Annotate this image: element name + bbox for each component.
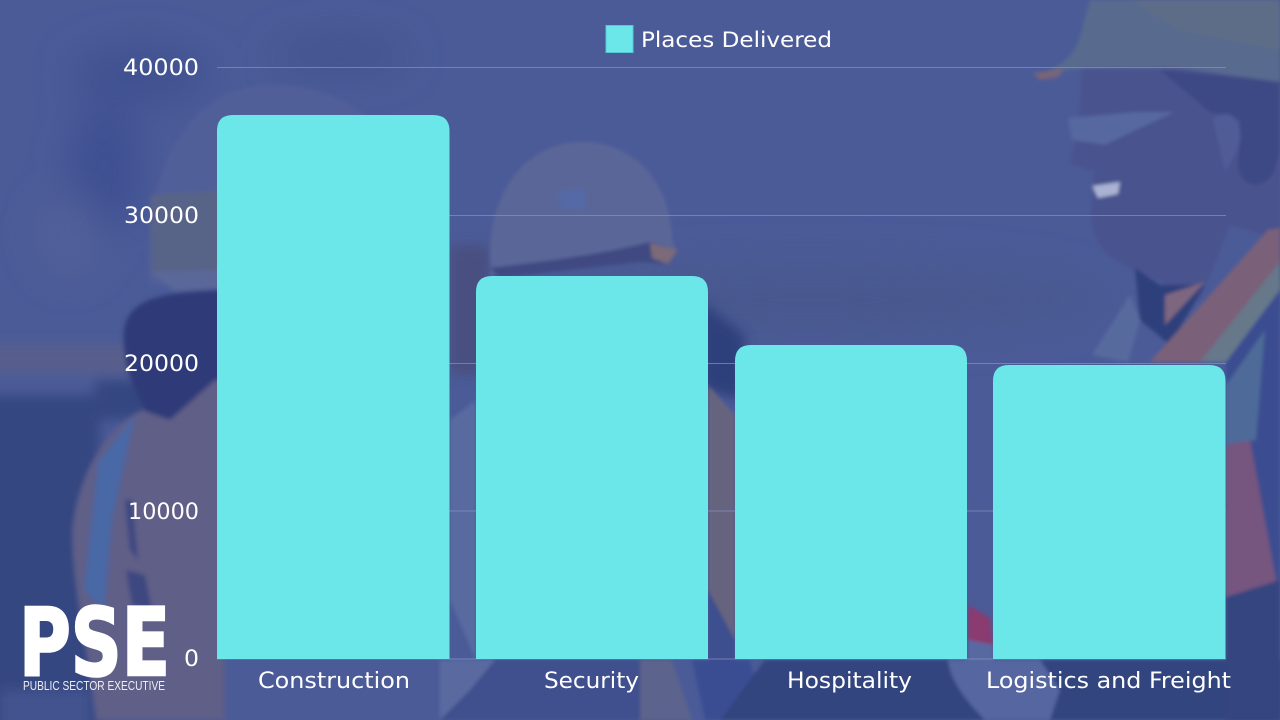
bar chart: [217, 115, 1226, 659]
centre worker: hard hat and vest: [440, 142, 1280, 720]
x axis labels: [258, 669, 1231, 694]
logo: PSE: PSE: [19, 589, 170, 698]
y axis labels: 30000: [124, 204, 199, 229]
legend label: Places Delivered: [641, 28, 832, 53]
left worker: hard hat, hair and vest: [72, 85, 400, 720]
y axis labels: 0: [184, 647, 199, 672]
x axis labels: Logistics and Freight: [986, 669, 1231, 694]
x axis labels: Security: [544, 669, 639, 694]
grid lines: [217, 68, 1226, 659]
y axis labels: [123, 56, 199, 672]
bar: Logistics and Freight: [993, 365, 1226, 659]
bar: Hospitality: [735, 345, 967, 659]
x axis labels: Hospitality: [787, 669, 912, 694]
right worker: hard hat, face and vest: [1033, 0, 1280, 720]
y axis labels: 10000: [128, 500, 199, 525]
legend swatch: [606, 26, 633, 52]
legend: [606, 26, 832, 53]
logo tagline: PUBLIC SECTOR EXECUTIVE: [23, 678, 165, 693]
y axis labels: 20000: [124, 352, 199, 377]
bar: Construction: [217, 115, 450, 659]
x axis labels: Construction: [258, 669, 410, 694]
bar: Security: [476, 276, 708, 659]
y axis labels: 40000: [123, 56, 199, 81]
